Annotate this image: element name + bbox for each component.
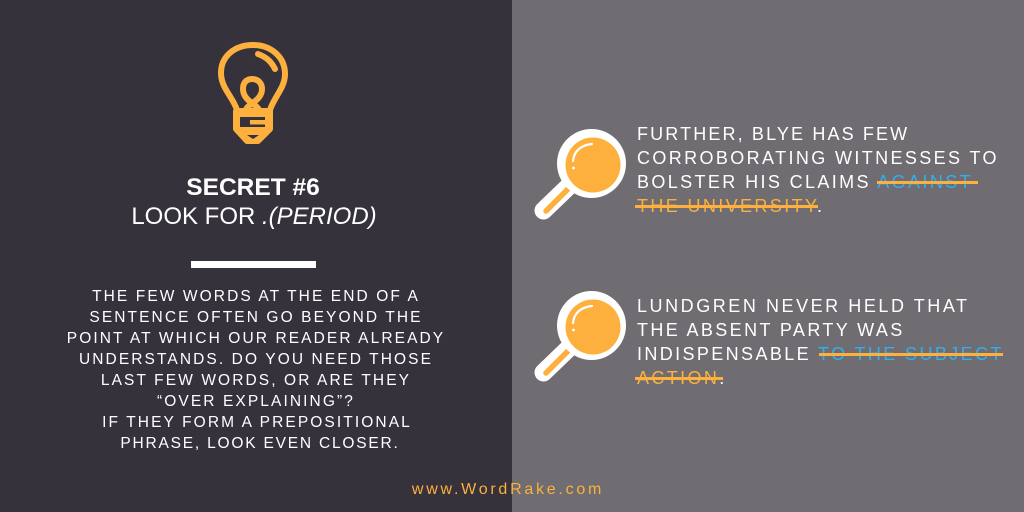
example text 1: FURTHER, BLYE HAS FEW	[637, 124, 909, 144]
body text: POINT AT WHICH OUR READER ALREADY	[67, 330, 445, 347]
body text: “OVER EXPLAINING”?	[157, 393, 355, 410]
example text 2: LUNDGREN NEVER HELD THAT	[637, 296, 970, 316]
example text 2: ACTION.	[637, 368, 727, 388]
panel: right background	[512, 0, 1024, 512]
body text	[67, 288, 445, 452]
body text: SENTENCE OFTEN GO BEYOND THE	[89, 309, 423, 326]
divider bar	[191, 261, 316, 268]
heading: SECRET #6	[186, 174, 320, 201]
body text: LAST FEW WORDS, OR ARE THEY	[101, 372, 411, 389]
icon: light bulb	[218, 42, 288, 144]
icon: magnifier 1	[534, 129, 626, 220]
body text: PHRASE, LOOK EVEN CLOSER.	[120, 435, 400, 452]
example text 2: INDISPENSABLE TO THE SUBJECT	[637, 344, 1004, 364]
body text: IF THEY FORM A PREPOSITIONAL	[102, 414, 412, 431]
icon: magnifier 2	[534, 291, 626, 382]
example text 1: CORROBORATING WITNESSES TO	[637, 148, 999, 168]
example text 1	[635, 124, 999, 216]
example text 1: BOLSTER HIS CLAIMS AGAINST	[637, 172, 973, 192]
body text: THE FEW WORDS AT THE END OF A	[92, 288, 420, 305]
example text 2	[635, 296, 1004, 388]
footer url: www.WordRake.com	[412, 481, 604, 498]
body text: UNDERSTANDS. DO YOU NEED THOSE	[79, 351, 433, 368]
subheading: LOOK FOR .(PERIOD)	[131, 203, 377, 230]
example text 1: THE UNIVERSITY.	[637, 196, 824, 216]
example text 2: THE ABSENT PARTY WAS	[637, 320, 905, 340]
